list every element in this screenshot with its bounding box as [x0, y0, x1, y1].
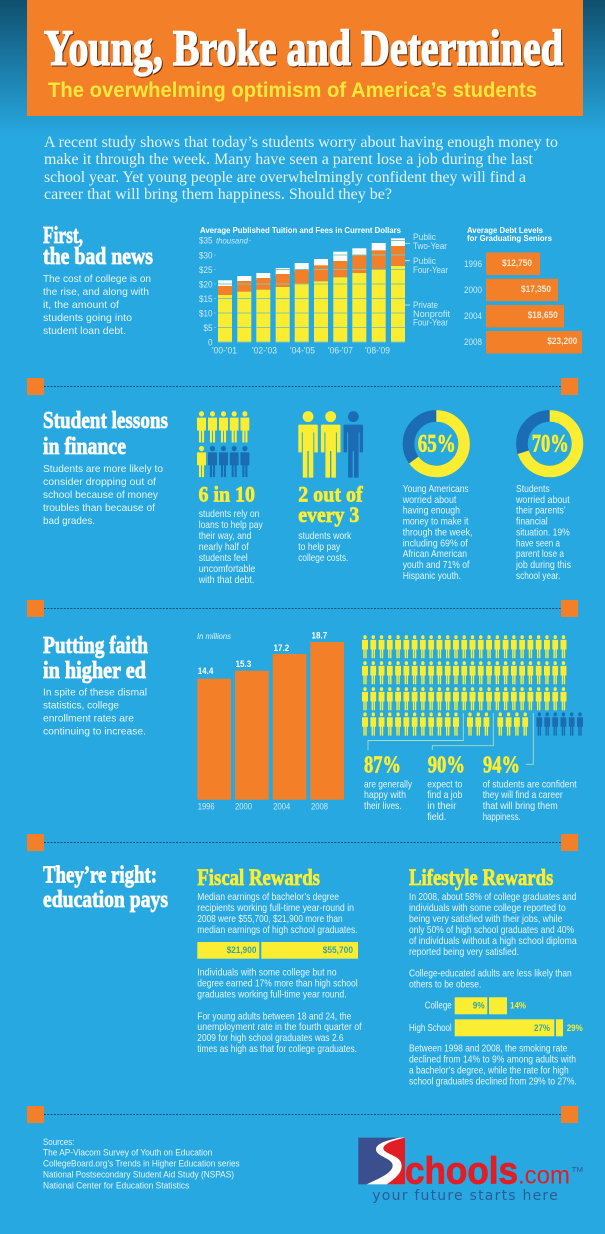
bar chart: enrollment: 18.7: [312, 631, 327, 642]
stacked bar chart: tuition: '02-'03: [252, 346, 277, 356]
panel: putting faith in higher ed: [43, 631, 583, 823]
text: 65% explanation: through the week,: [403, 528, 472, 539]
bar chart: obesity: [409, 997, 583, 1036]
body text: [43, 464, 163, 527]
stat: 94%: happiness.: [483, 812, 521, 823]
stacked bar chart: tuition: $20: [199, 280, 212, 290]
heading: [43, 222, 153, 270]
heading: They’re right:: [43, 862, 157, 889]
body text: [43, 274, 151, 337]
column: fiscal rewards: recipients working full-time year-round in: [197, 903, 354, 914]
bar chart: obesity: 29%: [567, 1023, 583, 1034]
donut chart: 70%: [522, 416, 578, 472]
column: fiscal rewards: Individuals with some college but no: [197, 968, 337, 979]
body text: troubles than because of: [43, 503, 155, 514]
stacked bar chart: tuition: $5: [204, 323, 212, 334]
bar chart: enrollment: 2008: [311, 802, 328, 813]
body text: student loan debt.: [43, 326, 126, 337]
heading: First,: [43, 222, 83, 249]
sources: Sources:: [43, 1137, 74, 1148]
bar chart: debt levels: $17,350: [521, 284, 551, 295]
body text: school because of money: [43, 490, 159, 501]
text: 70% explanation: Students: [516, 484, 550, 495]
body text: The cost of college is on: [43, 274, 151, 285]
bar chart: obesity: College: [425, 1001, 452, 1012]
body text: continuing to increase.: [43, 727, 146, 738]
body text: the rise, and along with: [43, 287, 149, 298]
column: fiscal rewards: unemployment rate in the fourth quarter of: [197, 1022, 362, 1033]
bar: earnings: $21,900: [227, 945, 256, 956]
body text: it, the amount of: [43, 300, 119, 311]
icon group: 6 in 10 people: [197, 411, 249, 477]
column: fiscal rewards: graduates working full-time year round.: [197, 989, 347, 1000]
column: fiscal rewards: 2008 were $55,700, $21,900 more than: [197, 914, 343, 925]
text: 70% explanation: worried about: [515, 495, 570, 506]
stacked bar chart: tuition: Nonprofit: [413, 309, 450, 320]
column: lifestyle rewards: declined from 14% to 9% among adults with: [409, 1055, 576, 1066]
sources: The AP-Viacom Survey of Youth on Education: [43, 1148, 212, 1159]
stat: 90%: [427, 752, 465, 823]
column: fiscal rewards: degree earned 17% more than high school: [197, 979, 358, 990]
bar chart: obesity: 27%: [534, 1023, 550, 1034]
sources: CollegeBoard.org’s Trends in Higher Education series: [43, 1158, 240, 1169]
column: lifestyle rewards: school graduates declined from 29% to 27%.: [409, 1077, 577, 1088]
logo: schools.com: your future starts here: [372, 1188, 558, 1204]
stat: 94%: 94%: [483, 752, 520, 779]
stat: 6 in 10: with that debt.: [198, 575, 254, 586]
bar chart: debt levels: $12,750: [502, 258, 532, 269]
column: fiscal rewards: Median earnings of bachelor’s degree: [197, 892, 339, 903]
stacked bar chart: tuition: '06-'07: [328, 346, 353, 356]
bar chart: debt levels: 2008: [464, 337, 482, 348]
heading: [43, 862, 168, 913]
stat: 2 out of every 3: [298, 482, 363, 564]
text: 65% explanation: Hispanic youth.: [403, 571, 461, 582]
body text: Students are more likely to: [43, 464, 163, 475]
logo: schools.com: [358, 1138, 583, 1204]
stat: 87%: happy with: [364, 790, 406, 801]
stat: 94%: of students are confident: [483, 780, 577, 791]
column: fiscal rewards: times as high as that for college graduates.: [197, 1044, 357, 1055]
text: 70% explanation: [515, 484, 571, 582]
logo: schools.com: chools: [405, 1150, 518, 1192]
stat: 6 in 10: students rely on: [199, 509, 259, 520]
text: 70% explanation: parent lose a: [516, 549, 564, 560]
icon group: 2 of 3 people: [298, 411, 363, 478]
panel: first, the bad news: [43, 222, 582, 356]
intro text: A recent study shows that today’s students worry about having enough money to: [44, 134, 558, 151]
column: lifestyle rewards: of individuals without a high school diploma: [409, 936, 577, 947]
stat: 90%: expect to: [427, 780, 463, 791]
stacked bar chart: tuition: $15: [199, 294, 212, 305]
stat: 2 out of every 3: college costs.: [298, 553, 348, 564]
logo: schools.com: .com: [518, 1161, 570, 1189]
column: lifestyle rewards: College-educated adults are less likely than: [409, 969, 572, 980]
column: fiscal rewards: [197, 865, 362, 1055]
stat: 2 out of every 3: students work: [298, 531, 352, 542]
bar: earnings: [197, 942, 358, 959]
text: 70% explanation: school year.: [516, 571, 560, 582]
stat: 6 in 10: their way, and: [199, 531, 251, 542]
stat: 90%: find a job: [427, 790, 463, 801]
stacked bar chart: tuition: 0: [208, 338, 212, 348]
text: 65% explanation: money to make it: [403, 517, 469, 528]
column: lifestyle rewards: a bachelor’s degree, while the rate for high: [409, 1066, 569, 1077]
bar chart: obesity: 9%: [473, 1000, 485, 1012]
text: 65% explanation: worried about: [402, 495, 457, 506]
body text: students going into: [43, 313, 132, 324]
column: lifestyle rewards: Lifestyle Rewards: [409, 865, 553, 890]
stacked bar chart: tuition: thousand: [216, 236, 248, 246]
stat: 2 out of every 3: every 3: [298, 502, 359, 527]
text: 70% explanation: situation. 19%: [516, 528, 570, 539]
bar chart: enrollment: 2004: [273, 802, 290, 813]
stacked bar chart: tuition: Private: [413, 300, 438, 311]
body text: bad grades.: [43, 516, 95, 527]
column: lifestyle rewards: [409, 865, 583, 1088]
bar chart: debt levels: Average Debt Levels: [467, 226, 543, 235]
column: lifestyle rewards: reported being very satisfied.: [409, 947, 519, 958]
heading: [43, 407, 168, 460]
bar: earnings: $55,700: [323, 945, 353, 956]
column: lifestyle rewards: individuals with some college reported to: [409, 903, 566, 914]
heading: the bad news: [43, 243, 153, 270]
donut chart: 65%: 65%: [418, 431, 456, 458]
sources: National Center for Education Statistics: [43, 1180, 189, 1191]
bar chart: obesity: 14%: [510, 1000, 526, 1012]
intro text: make it through the week. Many have seen a parent lose a job during the last: [44, 151, 534, 168]
body text: [43, 688, 147, 738]
subtitle: The overwhelming optimism of America’s students: [48, 78, 537, 102]
column: lifestyle rewards: Between 1998 and 2008, the smoking rate: [409, 1044, 568, 1055]
bar chart: enrollment: 17.2: [274, 643, 289, 654]
bar chart: debt levels: 2000: [464, 285, 482, 296]
column: lifestyle rewards: only 50% of high school graduates and 40%: [409, 925, 574, 936]
stat: 6 in 10: loans to help pay: [199, 520, 263, 531]
bar chart: enrollment: 14.4: [198, 666, 214, 677]
panel: header banner: [27, 0, 583, 116]
stacked bar chart: tuition: Public: [413, 232, 436, 243]
bar chart: debt levels: [464, 226, 582, 354]
stacked bar chart: tuition: $30: [199, 250, 212, 262]
bar chart: debt levels: $23,200: [547, 336, 577, 347]
bar chart: debt levels: 1996: [464, 259, 482, 270]
stacked bar chart: tuition: Two-Year: [413, 241, 447, 252]
text: 65% explanation: having enough: [403, 506, 460, 517]
text: 70% explanation: financial: [516, 517, 548, 528]
stacked bar chart: tuition: Four-Year: [413, 318, 448, 328]
panel: education pays: [43, 862, 583, 1088]
column: fiscal rewards: Fiscal Rewards: [197, 865, 320, 890]
stacked bar chart: tuition: [199, 226, 450, 356]
stat: 87%: their lives.: [364, 801, 402, 812]
bar chart: enrollment: 15.3: [236, 659, 251, 670]
stacked bar chart: tuition: '04-'05: [290, 346, 315, 356]
heading: in finance: [43, 433, 126, 460]
column: lifestyle rewards: In 2008, about 58% of college graduates and: [409, 892, 576, 903]
stat: 6 in 10: uncomfortable: [199, 564, 256, 575]
stat: 6 in 10: nearly half of: [199, 542, 249, 553]
bar chart: enrollment: 1996: [198, 802, 215, 813]
bar chart: enrollment: 2000: [235, 802, 252, 813]
body text: In spite of these dismal: [43, 688, 147, 699]
intro text: career that will bring them happiness. Should they be?: [44, 186, 392, 203]
bar chart: debt levels: for Graduating Seniors: [467, 234, 552, 243]
text: 65% explanation: Young Americans: [403, 484, 469, 495]
text: 70% explanation: job during this: [515, 560, 571, 571]
text: 70% explanation: their parents’: [516, 506, 566, 517]
stacked bar chart: tuition: $10: [199, 308, 212, 320]
bar chart: enrollment: In millions: [197, 631, 232, 641]
donut chart: 70%: 70%: [532, 431, 569, 458]
stat: 6 in 10: students feel: [199, 553, 248, 564]
icon: road S mark: [358, 1138, 405, 1184]
intro text: school year. Yet young people are overwhelmingly confident they will find a: [44, 169, 526, 186]
text: 65% explanation: including 69% of: [403, 538, 468, 549]
bar chart: enrollment: [197, 631, 344, 813]
stat: 87%: 87%: [364, 752, 401, 779]
stat: 2 out of every 3: 2 out of: [298, 482, 363, 507]
sources: [43, 1137, 240, 1191]
stacked bar chart: tuition: Public: [413, 256, 436, 267]
bar chart: obesity: High School: [409, 1023, 452, 1034]
heading: [43, 632, 148, 684]
body text: consider dropping out of: [43, 477, 156, 488]
stat: 6 in 10: [198, 482, 263, 586]
stat: 90%: in their: [427, 801, 457, 812]
column: lifestyle rewards: others to be obese.: [409, 980, 481, 991]
stacked bar chart: tuition: $25: [199, 265, 212, 276]
stat: 94%: that will bring them: [483, 801, 558, 812]
logo: schools.com: TM: [572, 1167, 583, 1174]
stacked bar chart: tuition: Average Published Tuition and Fees in Current Dollars: [200, 226, 401, 235]
heading: Student lessons: [43, 407, 168, 434]
donut chart: 65%: [408, 416, 464, 472]
bar chart: debt levels: 2004: [464, 311, 482, 322]
heading: in higher ed: [43, 657, 146, 684]
panel: student lessons in finance: [43, 407, 578, 586]
stacked bar chart: tuition: '00-'01: [212, 346, 237, 356]
stat: 90%: 90%: [428, 752, 465, 779]
stat: 94%: they will find a career: [483, 790, 563, 801]
text: 65% explanation: youth and 71% of: [403, 560, 470, 571]
stacked bar chart: tuition: $35: [199, 236, 212, 246]
intro text: [44, 134, 558, 203]
body text: enrollment rates are: [43, 714, 134, 725]
stat: 94%: [483, 752, 577, 823]
stat: 87%: [364, 752, 413, 812]
bar chart: debt levels: $18,650: [528, 310, 558, 321]
stacked bar chart: tuition: Four-Year: [413, 265, 448, 276]
text: 65% explanation: [402, 484, 472, 582]
sources: National Postsecondary Student Aid Study (NSPAS): [43, 1170, 234, 1181]
body text: statistics, college: [43, 701, 119, 712]
stat: 2 out of every 3: to help pay: [298, 542, 341, 553]
column: fiscal rewards: For young adults between 18 and 24, the: [197, 1011, 352, 1022]
column: fiscal rewards: median earnings of high school graduates.: [197, 925, 358, 936]
text: 65% explanation: African American: [403, 549, 467, 560]
stat: 90%: field.: [427, 812, 446, 823]
heading: education pays: [43, 886, 168, 913]
stacked bar chart: tuition: '08-'09: [365, 346, 390, 356]
column: lifestyle rewards: being very satisfied with their jobs, while: [409, 914, 563, 925]
text: 70% explanation: have seen a: [516, 538, 560, 549]
pictogram: 100 students: [362, 635, 583, 764]
stat: 87%: are generally: [364, 780, 413, 791]
heading: Putting faith: [43, 632, 148, 659]
stat: 6 in 10: 6 in 10: [198, 482, 255, 507]
column: fiscal rewards: 2009 for high school graduates was 2.6: [197, 1033, 344, 1044]
